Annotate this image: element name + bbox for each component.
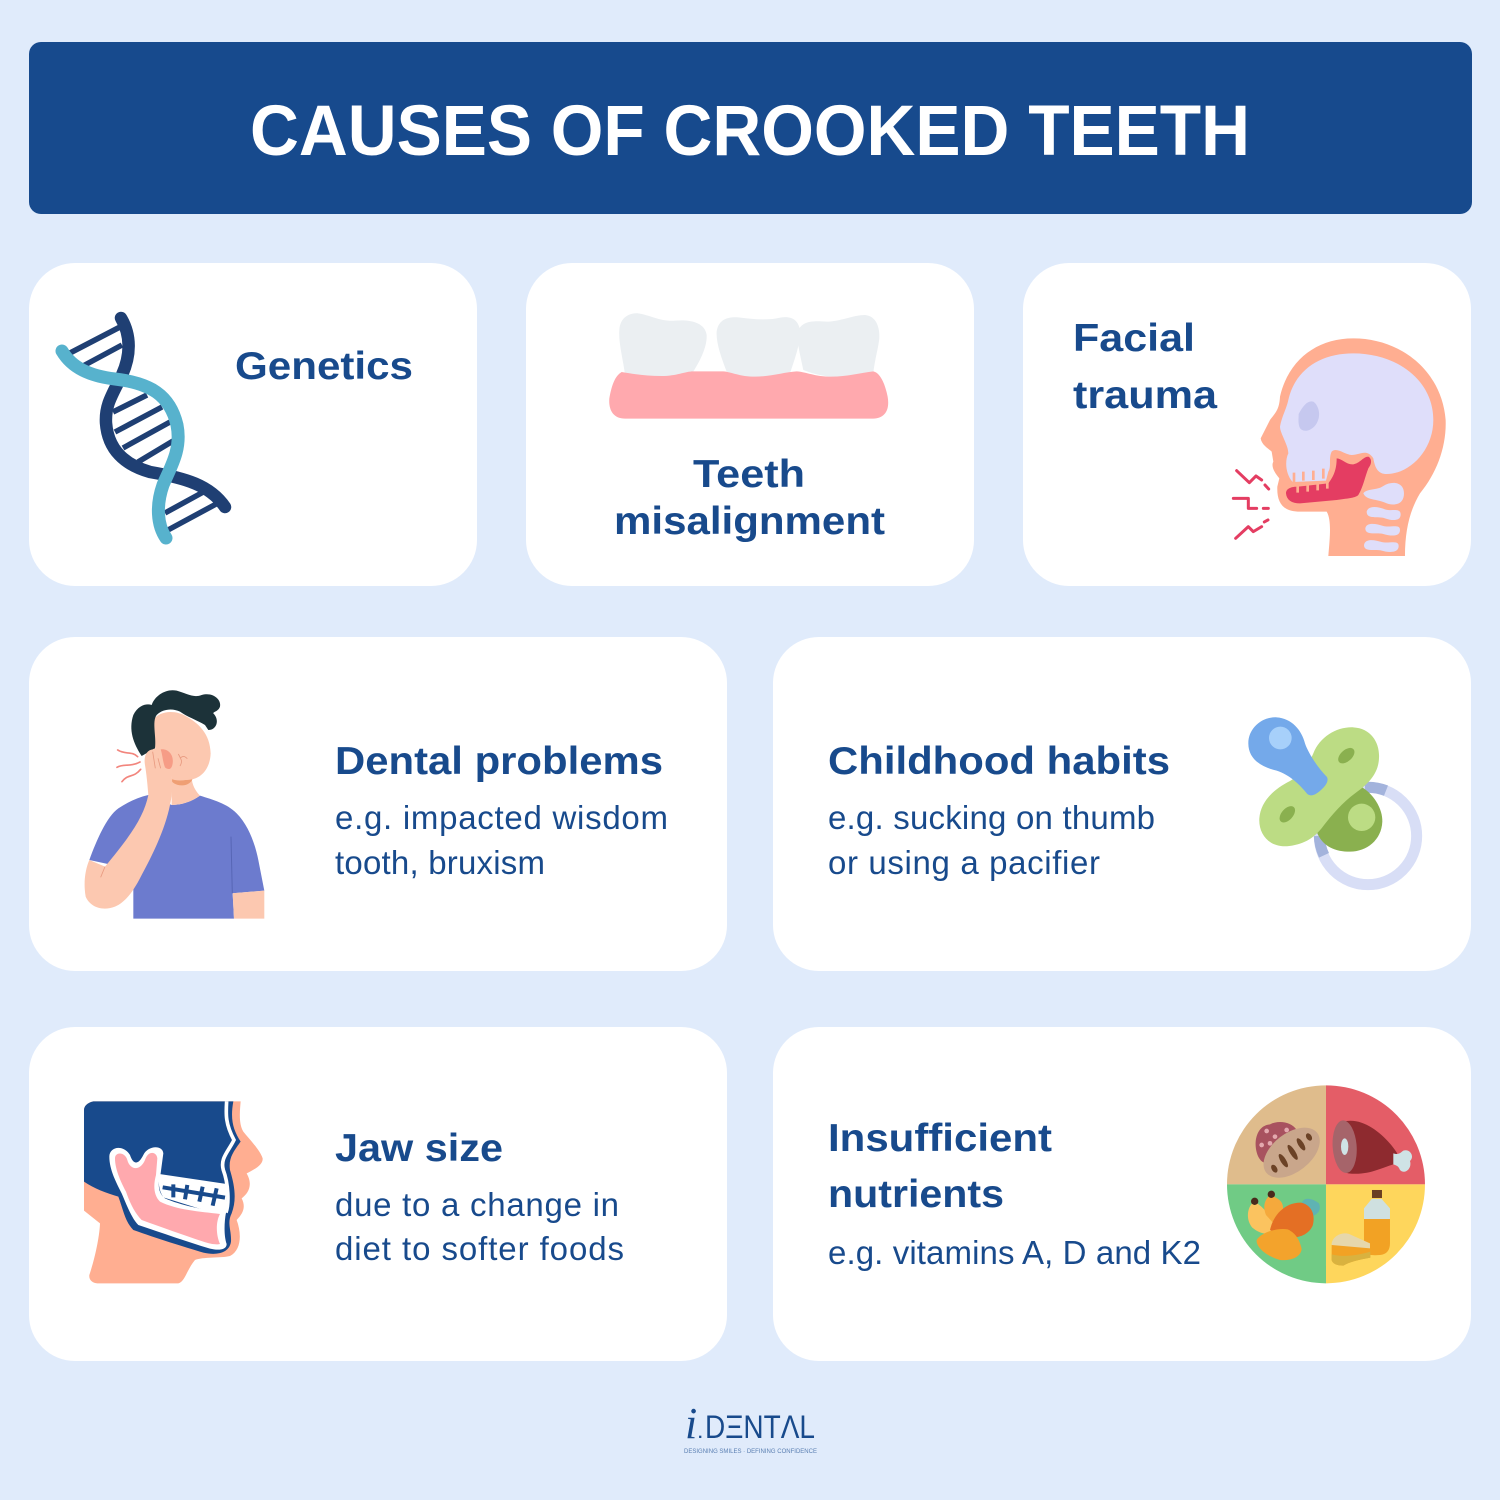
heading: facial trauma bbox=[1073, 317, 1217, 417]
logo: iDental bbox=[684, 1399, 817, 1455]
heading: genetics: Genetics bbox=[235, 345, 413, 388]
icon: teeth and gum bbox=[609, 313, 888, 419]
heading: insufficient nutrients: nutrients bbox=[828, 1173, 1004, 1216]
title banner bbox=[29, 42, 1472, 214]
heading: jaw size: Jaw size bbox=[335, 1127, 503, 1170]
icon: man with toothache bbox=[85, 690, 264, 919]
heading: insufficient nutrients: Insufficient bbox=[828, 1117, 1052, 1160]
body: childhood habits bbox=[828, 799, 1155, 881]
body: jaw size: due to a change in bbox=[335, 1186, 619, 1223]
panel: teeth misalignment bbox=[526, 263, 974, 586]
heading: insufficient nutrients bbox=[828, 1117, 1052, 1216]
heading: teeth misalignment: misalignment bbox=[614, 500, 885, 543]
body: insufficient nutrients: e.g. vitamins A, D and K2 bbox=[828, 1234, 1201, 1271]
panel: jaw size bbox=[29, 1027, 727, 1361]
heading: facial trauma: trauma bbox=[1073, 374, 1217, 417]
icon: DNA helix bbox=[62, 318, 225, 538]
heading: childhood habits: Childhood habits bbox=[828, 740, 1170, 783]
body: childhood habits: or using a pacifier bbox=[828, 844, 1100, 881]
body: childhood habits: e.g. sucking on thumb bbox=[828, 799, 1155, 836]
icon: head with jaw injury bbox=[1233, 338, 1446, 556]
body: dental problems: e.g. impacted wisdom bbox=[335, 799, 668, 836]
panel: childhood habits bbox=[773, 637, 1471, 971]
title: CAUSES OF CROOKED TEETH bbox=[250, 92, 1250, 171]
heading: facial trauma: Facial bbox=[1073, 317, 1195, 360]
logo: iDental: i bbox=[685, 1399, 697, 1448]
body: dental problems bbox=[335, 799, 668, 881]
body: jaw size bbox=[335, 1186, 624, 1267]
heading: teeth misalignment: Teeth bbox=[693, 453, 805, 496]
body: dental problems: tooth, bruxism bbox=[335, 844, 545, 881]
logo: iDental: DΞNTΛL bbox=[705, 1409, 815, 1445]
heading: teeth misalignment bbox=[614, 453, 885, 543]
panel: genetics bbox=[29, 263, 477, 586]
icon: pacifier bbox=[1248, 717, 1417, 885]
icon: food plate bbox=[1227, 1085, 1425, 1283]
heading: dental problems: Dental problems bbox=[335, 740, 663, 783]
panel: facial trauma bbox=[1023, 263, 1471, 586]
body: jaw size: diet to softer foods bbox=[335, 1230, 624, 1267]
panel: dental problems bbox=[29, 637, 727, 971]
icon: jaw cross-section bbox=[84, 1101, 263, 1283]
logo: iDental: DESIGNING SMILES · DEFINING CONFIDENCE bbox=[684, 1449, 817, 1455]
logo: iDental: . bbox=[698, 1425, 702, 1442]
panel: insufficient nutrients bbox=[773, 1027, 1471, 1361]
